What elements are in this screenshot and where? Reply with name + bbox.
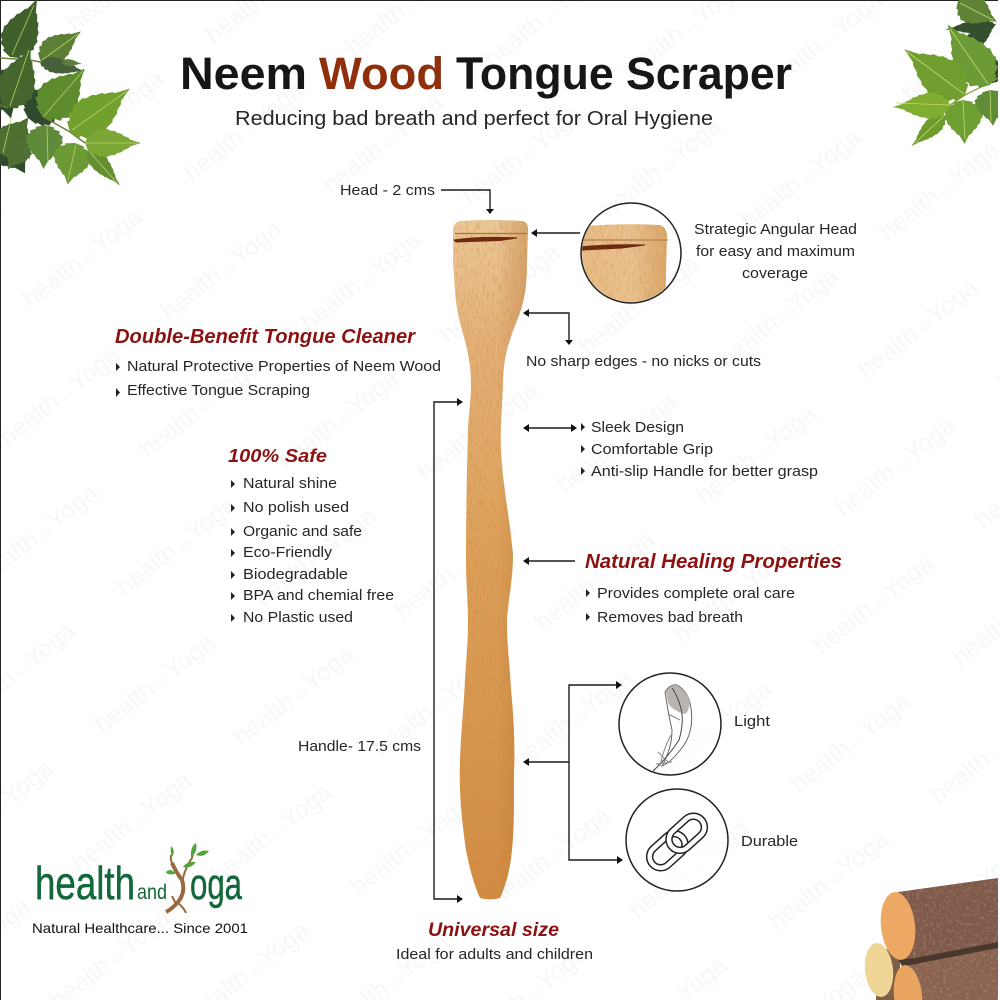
panel: double-benefit: Effective Tongue Scraping bbox=[127, 383, 310, 399]
panel: 100% safe bbox=[228, 445, 394, 626]
icon: neem leaves top right bbox=[892, 0, 1000, 170]
panel: 100% safe: Eco-Friendly bbox=[243, 545, 333, 561]
subtitle: Reducing bad breath and perfect for Oral Hygiene bbox=[235, 107, 713, 130]
title: Neem bbox=[180, 48, 307, 99]
text: strategic angular head: for easy and maximum bbox=[696, 244, 855, 260]
text: universal size bbox=[396, 920, 593, 963]
title: Tongue Scraper bbox=[456, 48, 792, 99]
icon: chain link bbox=[626, 789, 728, 891]
logo: health and yoga: and bbox=[137, 881, 167, 904]
text: durable: Durable bbox=[741, 834, 798, 850]
panel: 100% safe: Natural shine bbox=[243, 476, 337, 492]
logo: health and yoga bbox=[32, 843, 248, 936]
callout: sleek design bbox=[523, 420, 818, 480]
icon: logo tree bbox=[166, 843, 209, 913]
panel: natural healing properties: Natural Healing Properties bbox=[585, 551, 842, 573]
text: strategic angular head: coverage bbox=[742, 266, 808, 282]
bracket: handle length: Handle- 17.5 cms bbox=[298, 739, 421, 755]
callout: sleek design: Sleek Design bbox=[591, 420, 684, 436]
callout: no sharp edges bbox=[523, 309, 761, 370]
icon: logs bbox=[862, 860, 1000, 1000]
panel: double-benefit: Double-Benefit Tongue Cleaner bbox=[115, 326, 416, 348]
panel: double-benefit bbox=[115, 326, 441, 399]
panel: 100% safe: BPA and chemial free bbox=[243, 588, 394, 604]
panel: 100% safe: Organic and safe bbox=[243, 524, 362, 540]
connector: light and durable bbox=[523, 681, 623, 864]
logo: health and yoga: health bbox=[35, 857, 135, 909]
text: universal size: Ideal for adults and children bbox=[396, 947, 593, 963]
panel: natural healing properties: Provides complete oral care bbox=[597, 586, 795, 602]
panel: natural healing properties: Removes bad breath bbox=[597, 610, 743, 626]
label: head size: Head - 2 cms bbox=[340, 183, 435, 199]
text: light: Light bbox=[734, 714, 770, 730]
callout: no sharp edges: No sharp edges - no nicks or cuts bbox=[526, 354, 761, 370]
text: universal size: Universal size bbox=[428, 920, 559, 941]
title bbox=[180, 48, 792, 99]
panel: double-benefit: Natural Protective Properties of Neem Wood bbox=[127, 359, 441, 375]
panel: 100% safe: Biodegradable bbox=[243, 567, 348, 583]
bracket: handle length bbox=[298, 398, 463, 903]
panel: natural healing properties bbox=[523, 551, 842, 626]
icon: feather bbox=[619, 673, 721, 775]
panel: 100% safe: No polish used bbox=[243, 500, 349, 516]
scraper product bbox=[453, 220, 528, 900]
text: strategic angular head: Strategic Angular Head bbox=[694, 222, 857, 238]
title: Wood bbox=[319, 48, 444, 99]
icon: neem leaves top left bbox=[0, 0, 142, 192]
callout: sleek design: Anti-slip Handle for better grasp bbox=[591, 464, 818, 480]
zoom circle: angular head bbox=[580, 203, 681, 310]
label: head size bbox=[340, 183, 494, 214]
text: strategic angular head bbox=[694, 222, 857, 282]
callout: sleek design: Comfortable Grip bbox=[591, 442, 713, 458]
logo: health and yoga: Natural Healthcare... Since 2001 bbox=[32, 920, 248, 936]
panel: 100% safe: 100% Safe bbox=[228, 445, 327, 466]
arrow: to angular head bbox=[531, 229, 580, 237]
logo: health and yoga: oga bbox=[190, 860, 242, 909]
panel: 100% safe: No Plastic used bbox=[243, 610, 353, 626]
